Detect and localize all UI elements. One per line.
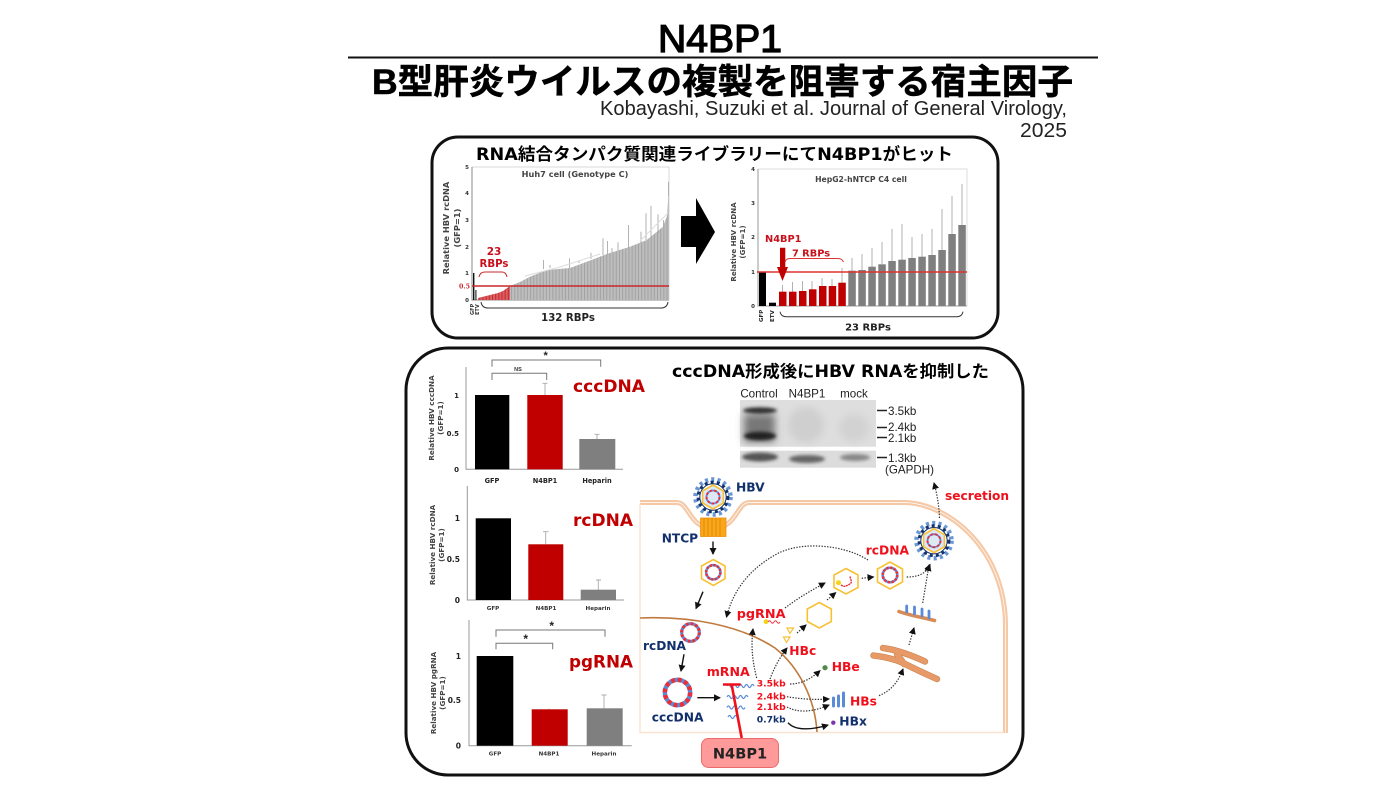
bar chart: HepG2-hNTCP validation: Relative HBV rcDNA	[729, 202, 738, 282]
callout: 7 RBPs	[785, 249, 844, 262]
bar chart: rcDNA: Relative HBV rcDNA	[428, 504, 437, 585]
bar chart: cccDNA: (GFP=1)	[436, 401, 445, 435]
panel: RBP library screen	[432, 137, 998, 338]
bar chart: cccDNA	[427, 350, 646, 485]
arrow: pgRNA to capsid	[785, 583, 825, 608]
bar chart: Huh7 screen: 1	[465, 271, 469, 277]
panel: mechanism	[406, 348, 1023, 775]
callout: 7 RBPs: 7 RBPs	[792, 249, 830, 260]
bar chart: Huh7 screen: 0	[465, 298, 469, 304]
label: pgRNA: pgRNA	[737, 607, 786, 622]
panel heading: library screen: RNA結合タンパク質関連ライブラリーにてN4BP1がヒット	[476, 144, 953, 165]
arrow: rcDNA recycling	[726, 546, 868, 617]
callout: N4BP1 arrow: N4BP1	[765, 234, 802, 245]
bar chart: cccDNA: N4BP1	[533, 477, 558, 485]
northern blot: 3.5kb	[888, 405, 916, 418]
arrow: 3.5kb to pgRNA	[752, 629, 757, 678]
arrow: cccDNA to mRNA	[697, 697, 720, 699]
icon: mRNA transcripts	[727, 684, 754, 718]
bar chart: pgRNA: 0.5	[448, 696, 461, 705]
bar chart: Huh7 screen: Relative HBV rcDNA	[441, 181, 451, 274]
bar chart: cccDNA: GFP	[485, 477, 500, 485]
arrow: capsid to nucleus	[696, 592, 703, 608]
label: transcript sizes	[757, 679, 786, 725]
bar chart: rcDNA: GFP	[487, 606, 499, 612]
bar chart: HepG2-hNTCP validation: GFP	[759, 310, 765, 322]
icon: Golgi	[874, 648, 937, 679]
bar chart: Huh7 screen: Huh7 cell (Genotype C)	[522, 169, 629, 179]
label: NTCP: NTCP	[662, 532, 698, 546]
northern blot: 1.3kb	[888, 452, 916, 465]
bar chart: cccDNA: Heparin	[582, 477, 612, 485]
bar chart: cccDNA: 0	[454, 466, 459, 474]
label: rcDNA cytoplasm: rcDNA	[866, 543, 910, 557]
bar chart: Huh7 screen	[441, 165, 669, 324]
subtitle: B型肝炎ウイルスの複製を阻害する宿主因子	[372, 63, 1073, 102]
callout: N4BP1 box	[702, 738, 778, 768]
arrow: rcDNA to cccDNA	[681, 654, 684, 671]
citation: 2025	[1020, 120, 1067, 142]
callout: 23 RBPs: 23	[487, 246, 501, 258]
northern blot	[740, 388, 934, 476]
inhibition marker: N4BP1 to mRNA	[723, 684, 742, 738]
title rule	[348, 56, 1098, 58]
icon: NTCP receptor	[700, 518, 726, 536]
icon: pgRNA capsid	[834, 568, 858, 594]
bar chart: rcDNA: 0.5	[447, 555, 460, 564]
callout: 23 RBPs: RBPs	[480, 259, 508, 270]
citation	[600, 98, 1067, 142]
icon: rcDNA capsid	[878, 562, 902, 589]
label: mRNA: mRNA	[707, 664, 750, 679]
label: rcDNA nucleus: rcDNA	[643, 639, 687, 653]
bar chart: Huh7 screen: GFP	[470, 303, 476, 315]
bar chart: cccDNA: Relative HBV cccDNA	[427, 375, 436, 461]
icon: ER with HBs	[899, 606, 934, 620]
bar chart: Huh7 screen: ETV	[475, 304, 481, 315]
bar chart: HepG2-hNTCP validation: 4	[751, 167, 755, 173]
icon: empty capsid	[807, 602, 831, 628]
bar chart: pgRNA: (GFP=1)	[438, 676, 447, 710]
diagram: HBV life cycle	[640, 480, 1009, 768]
icon: entering capsid	[702, 560, 725, 586]
bar chart: HepG2-hNTCP validation: 1	[751, 270, 755, 276]
northern blot: N4BP1	[789, 388, 825, 400]
label: transcript sizes: 2.1kb	[757, 702, 786, 713]
arrow: empty capsid to pgRNA capsid	[827, 593, 836, 600]
arrow: HBs to Golgi	[879, 669, 903, 696]
arrow: 2.4kb to HBs	[787, 697, 829, 699]
bar chart: Huh7 screen: 5	[465, 165, 469, 171]
arrow: secretion	[934, 483, 940, 518]
label: secretion: secretion	[945, 489, 1009, 503]
label: HBs: HBs	[850, 695, 877, 709]
bar chart: pgRNA: 1	[456, 652, 461, 661]
bar chart: cccDNA: 1	[454, 392, 459, 400]
bar chart: HepG2-hNTCP validation: 0	[751, 304, 755, 310]
bar chart: HepG2-hNTCP validation: 23 RBPs	[845, 323, 891, 334]
bar chart: pgRNA: GFP	[489, 752, 501, 758]
arrow: rc capsid to virion	[907, 564, 930, 577]
label: cccDNA: cccDNA	[652, 711, 704, 725]
northern blot: mock	[840, 388, 868, 400]
arrow: ER to virion	[923, 565, 929, 603]
bar chart: pgRNA: N4BP1	[539, 752, 560, 758]
icon: mature virion	[916, 523, 952, 558]
bar chart: rcDNA: Heparin	[586, 606, 610, 612]
title: N4BP1	[658, 18, 782, 61]
arrow: NTCP to capsid	[712, 542, 714, 554]
label: HBx: HBx	[839, 715, 867, 729]
arrow: screen to validation	[681, 198, 715, 264]
bar chart: pgRNA: pgRNA	[569, 653, 634, 673]
northern blot: 2.1kb	[888, 432, 916, 445]
panel heading: mechanism: cccDNA形成後にHBV RNAを抑制した	[672, 361, 989, 381]
callout: N4BP1 arrow	[765, 234, 802, 281]
bar chart: cccDNA: cccDNA	[573, 377, 646, 397]
bar chart: rcDNA: (GFP=1)	[437, 528, 446, 562]
icon: HBc subunits	[784, 628, 794, 642]
bar chart: HepG2-hNTCP validation: ETV	[770, 309, 776, 322]
bar chart: HepG2-hNTCP validation: HepG2-hNTCP C4 cell	[815, 175, 907, 184]
bar chart: Huh7 screen: 3	[465, 218, 469, 224]
icon: HBx dot	[831, 720, 836, 725]
arrow: Golgi to ER	[909, 628, 914, 645]
bar chart: rcDNA: 0	[455, 596, 460, 605]
bar chart: HepG2-hNTCP validation: (GFP=1)	[738, 225, 747, 259]
arrow: 3.5kb to HBe	[790, 671, 820, 684]
bar chart: rcDNA: 1	[455, 514, 460, 523]
label: transcript sizes: 3.5kb	[757, 679, 786, 690]
icon: rcDNA in nucleus	[682, 624, 699, 641]
bar chart: pgRNA: 0	[456, 742, 461, 750]
icon: HBV virion entering	[696, 480, 730, 514]
label: HBc: HBc	[789, 644, 816, 658]
bar chart: HepG2-hNTCP validation	[729, 167, 967, 334]
arrow: 2.1kb to HBs	[787, 705, 829, 711]
citation: Kobayashi, Suzuki et al. Journal of General Virology,	[600, 98, 1067, 120]
northern blot: 2.4kb	[888, 421, 916, 434]
icon: HBs proteins	[834, 693, 844, 706]
bar chart: pgRNA: Relative HBV pgRNA	[429, 651, 438, 734]
callout: N4BP1 box: N4BP1	[713, 746, 767, 762]
callout: 23 RBPs	[479, 246, 508, 277]
bar chart: cccDNA: NS	[514, 367, 522, 373]
bar chart: rcDNA: N4BP1	[536, 606, 557, 612]
bar chart: Huh7 screen: 132 RBPs	[541, 313, 595, 324]
arrow: 3.5kb to HBc	[770, 648, 787, 679]
label: transcript sizes: 0.7kb	[757, 714, 786, 725]
bar chart: rcDNA: rcDNA	[573, 511, 634, 531]
label: HBe: HBe	[832, 660, 860, 674]
northern blot: Control	[740, 388, 778, 400]
cell membrane	[640, 502, 1006, 733]
bar chart: pgRNA: Heparin	[592, 752, 616, 758]
bar chart: Huh7 screen: 2	[465, 245, 469, 251]
bar chart: pgRNA: *	[549, 619, 554, 633]
nuclear membrane	[640, 618, 817, 732]
bar chart: Huh7 screen: 4	[465, 191, 469, 197]
arrow: pgRNA capsid to rc capsid	[862, 577, 874, 578]
bar chart: HepG2-hNTCP validation: 3	[751, 201, 755, 207]
icon: HBe dot	[822, 665, 828, 670]
icon: pgRNA strand	[764, 619, 780, 624]
bar chart: Huh7 screen: 0.5	[459, 284, 470, 290]
icon: cccDNA ring	[665, 680, 690, 705]
bar chart: pgRNA: *	[523, 632, 528, 646]
label: HBV: HBV	[736, 481, 765, 495]
bar chart: HepG2-hNTCP validation: 2	[751, 235, 755, 241]
bar chart: Huh7 screen: (GFP=1)	[452, 208, 462, 247]
arrow: subunits to capsid	[797, 625, 806, 633]
bar chart: cccDNA: 0.5	[447, 430, 459, 438]
bar chart: cccDNA: *	[544, 350, 549, 362]
label: transcript sizes: 2.4kb	[757, 691, 786, 702]
bar chart: pgRNA	[429, 619, 634, 758]
bar chart: rcDNA	[428, 486, 634, 612]
northern blot: (GAPDH)	[885, 464, 934, 476]
arrow: 0.7kb to HBx	[788, 723, 828, 729]
